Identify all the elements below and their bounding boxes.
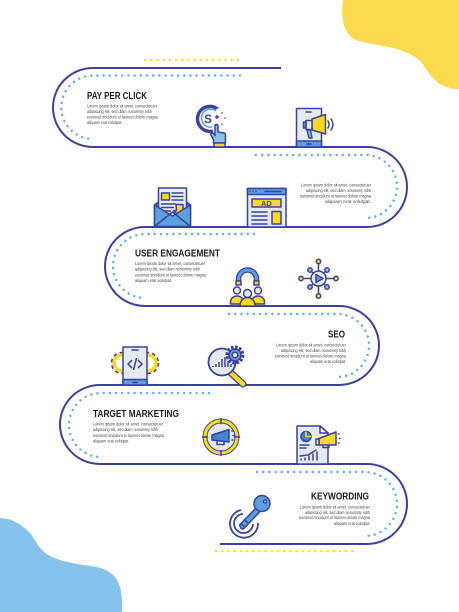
text block 4 xyxy=(275,342,346,364)
text block 2: aliquam erat volutpat. xyxy=(325,199,371,204)
icon: seo magnifier xyxy=(208,348,243,384)
text block 5: aliquam erat volutpat. xyxy=(93,438,129,444)
text block 2: adipiscing elit, sed diam nonummy nibh xyxy=(306,188,371,193)
dotted inner line 3 xyxy=(113,234,254,298)
text block 6: Lorem ipsum dolor sit amet, consectetuer xyxy=(300,504,370,510)
icon: target megaphone xyxy=(202,418,240,456)
dotted inner line 2 xyxy=(256,155,397,218)
dotted inner line 1 xyxy=(61,76,240,139)
icon: dollar click xyxy=(198,106,226,147)
text block 3 xyxy=(135,261,206,283)
heading: keywording: KEYWORDING xyxy=(311,490,369,502)
text block 6: aliquam erat volutpat. xyxy=(334,521,370,526)
text block 1: euismod tincidunt ut laoreet dolore magna xyxy=(87,114,158,120)
heading: seo: SEO xyxy=(328,328,345,340)
icon: network hub xyxy=(299,259,338,298)
text block 5: euismod tincidunt ut laoreet dolore magna xyxy=(93,433,164,438)
icon: dollar click: S xyxy=(204,112,212,126)
icon: mobile code xyxy=(114,347,156,385)
dotted inner line 4 xyxy=(229,314,369,377)
text block 3: Lorem ipsum dolor sit amet, consectetuer xyxy=(135,261,205,266)
heading: target marketing: TARGET MARKETING xyxy=(93,408,179,420)
decorative blob: yellow top right xyxy=(342,0,459,89)
text block 5: adipiscing elit, sed diam nonummy nibh xyxy=(93,427,158,432)
panel: email and ad xyxy=(154,155,397,227)
text block 1: adipiscing elit, sed diam nonummy nibh xyxy=(87,109,152,114)
icon: phone megaphone xyxy=(296,108,333,147)
icon: email newsletter xyxy=(154,188,190,226)
icon: report and megaphone xyxy=(297,426,340,464)
text block 6 xyxy=(299,504,370,526)
yellow dotted line bottom xyxy=(216,550,358,552)
winding timeline path xyxy=(53,68,407,544)
text block 3: aliquam erat volutpat. xyxy=(135,278,172,283)
text block 2: Lorem ipsum dolor sit amet, consectetuer xyxy=(301,182,371,188)
dotted inner line 6 xyxy=(257,472,397,536)
text block 1: aliquam erat volutpat. xyxy=(87,120,122,125)
panel: target marketing xyxy=(69,393,340,464)
text block 1: Lorem ipsum dolor sit amet, consectetuer xyxy=(87,104,157,108)
text block 2: euismod tincidunt ut laoreet dolore magna xyxy=(300,194,371,198)
text block 5 xyxy=(93,422,164,444)
text block 4: adipiscing elit, sed diam nonummy nibh xyxy=(281,348,346,353)
text block 6: adipiscing elit, sed diam nonummy nibh xyxy=(305,510,370,515)
text block 2 xyxy=(300,182,371,204)
heading: user engagement: USER ENGAGEMENT xyxy=(135,248,220,260)
text block 4: aliquam erat volutpat. xyxy=(310,359,346,364)
decorative blob: blue bottom left xyxy=(0,518,122,612)
text block 5: Lorem ipsum dolor sit amet, consectetuer xyxy=(93,422,163,426)
icon: browser ad: AD xyxy=(261,199,272,208)
icon: magnet and people xyxy=(230,270,264,306)
text block 1 xyxy=(87,104,158,125)
text block 4: Lorem ipsum dolor sit amet, consectetuer xyxy=(276,342,346,348)
heading: pay per click: PAY PER CLICK xyxy=(87,90,147,102)
text block 6: euismod tincidunt ut laoreet dolore magna xyxy=(299,515,370,520)
dotted inner line 5 xyxy=(69,393,209,457)
yellow dotted line top xyxy=(145,59,240,61)
panel: seo xyxy=(114,314,369,385)
panel: keywording xyxy=(230,472,397,538)
panel: user engagement xyxy=(113,234,338,306)
icon: browser ad xyxy=(248,188,286,227)
icon: key and rings xyxy=(230,496,270,538)
text block 4: euismod tincidunt ut laoreet dolore magna xyxy=(275,354,346,358)
text block 3: euismod tincidunt ut laoreet dolore magna xyxy=(135,272,206,277)
text block 3: adipiscing elit, sed diam nonummy nibh xyxy=(135,267,200,272)
panel: pay per click xyxy=(61,76,333,147)
